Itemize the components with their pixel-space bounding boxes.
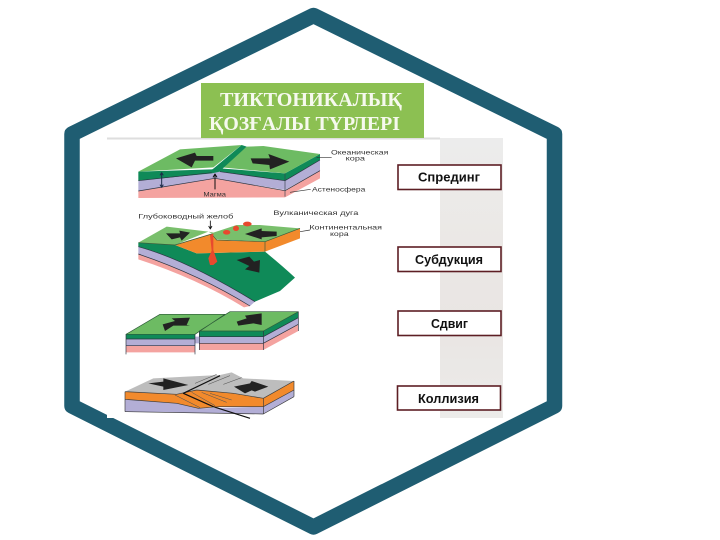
button: collision [398, 386, 500, 410]
arrow: slab [237, 257, 260, 273]
arrow: right plate [237, 313, 262, 326]
label: asthenosphere: Астеносфера [312, 187, 366, 194]
arrow: right plate [234, 381, 268, 393]
arrow: right plate [251, 154, 289, 169]
diagram: subduction [138, 210, 382, 307]
icon: volcanoes [223, 222, 252, 235]
button: subduction: Субдукция [415, 252, 483, 267]
diagram: collision [125, 372, 294, 418]
button: collision: Коллизия [418, 391, 479, 406]
diagrams, drawn in 3x zoom coordinates [125, 145, 388, 418]
diagram: spreading [138, 145, 388, 198]
arrow: trench [209, 221, 212, 229]
hexagon frame [72, 16, 554, 527]
arrow: magma [213, 174, 217, 189]
label: continental crust [309, 225, 382, 238]
button: subduction [398, 247, 501, 272]
label: oceanic crust [331, 150, 388, 163]
label: continental crust: Континентальная [309, 225, 382, 232]
panel: diagram image background [107, 138, 503, 418]
button: spreading [398, 165, 501, 190]
label: oceanic crust: кора [346, 156, 366, 163]
arrow: left plate [148, 378, 188, 390]
label: oceanic crust: Океаническая [331, 150, 388, 157]
button: strike-slip [398, 311, 501, 336]
label: volcanic arc: Вулканическая дуга [273, 210, 359, 217]
title [201, 83, 424, 138]
label: deep-sea trench: Глубоководный желоб [138, 212, 234, 220]
button: spreading: Спрединг [418, 170, 481, 184]
button: strike-slip: Сдвиг [431, 316, 469, 331]
diagram: strike-slip fault [126, 312, 298, 354]
label: continental crust: кора [330, 231, 349, 238]
arrow: left plate [166, 231, 190, 241]
title: ҚОЗҒАЛЫ ТҮРЛЕРІ [209, 114, 400, 135]
label lines [290, 157, 332, 192]
title: ТИКТОНИКАЛЫҚ [220, 90, 402, 111]
arrow: right plate [245, 228, 277, 239]
icon: magma dike [208, 233, 217, 265]
arrow: thickness [160, 173, 163, 187]
label: magma: Магма [203, 192, 227, 198]
arrow: left plate [163, 318, 190, 331]
arrow: left plate [176, 153, 213, 167]
